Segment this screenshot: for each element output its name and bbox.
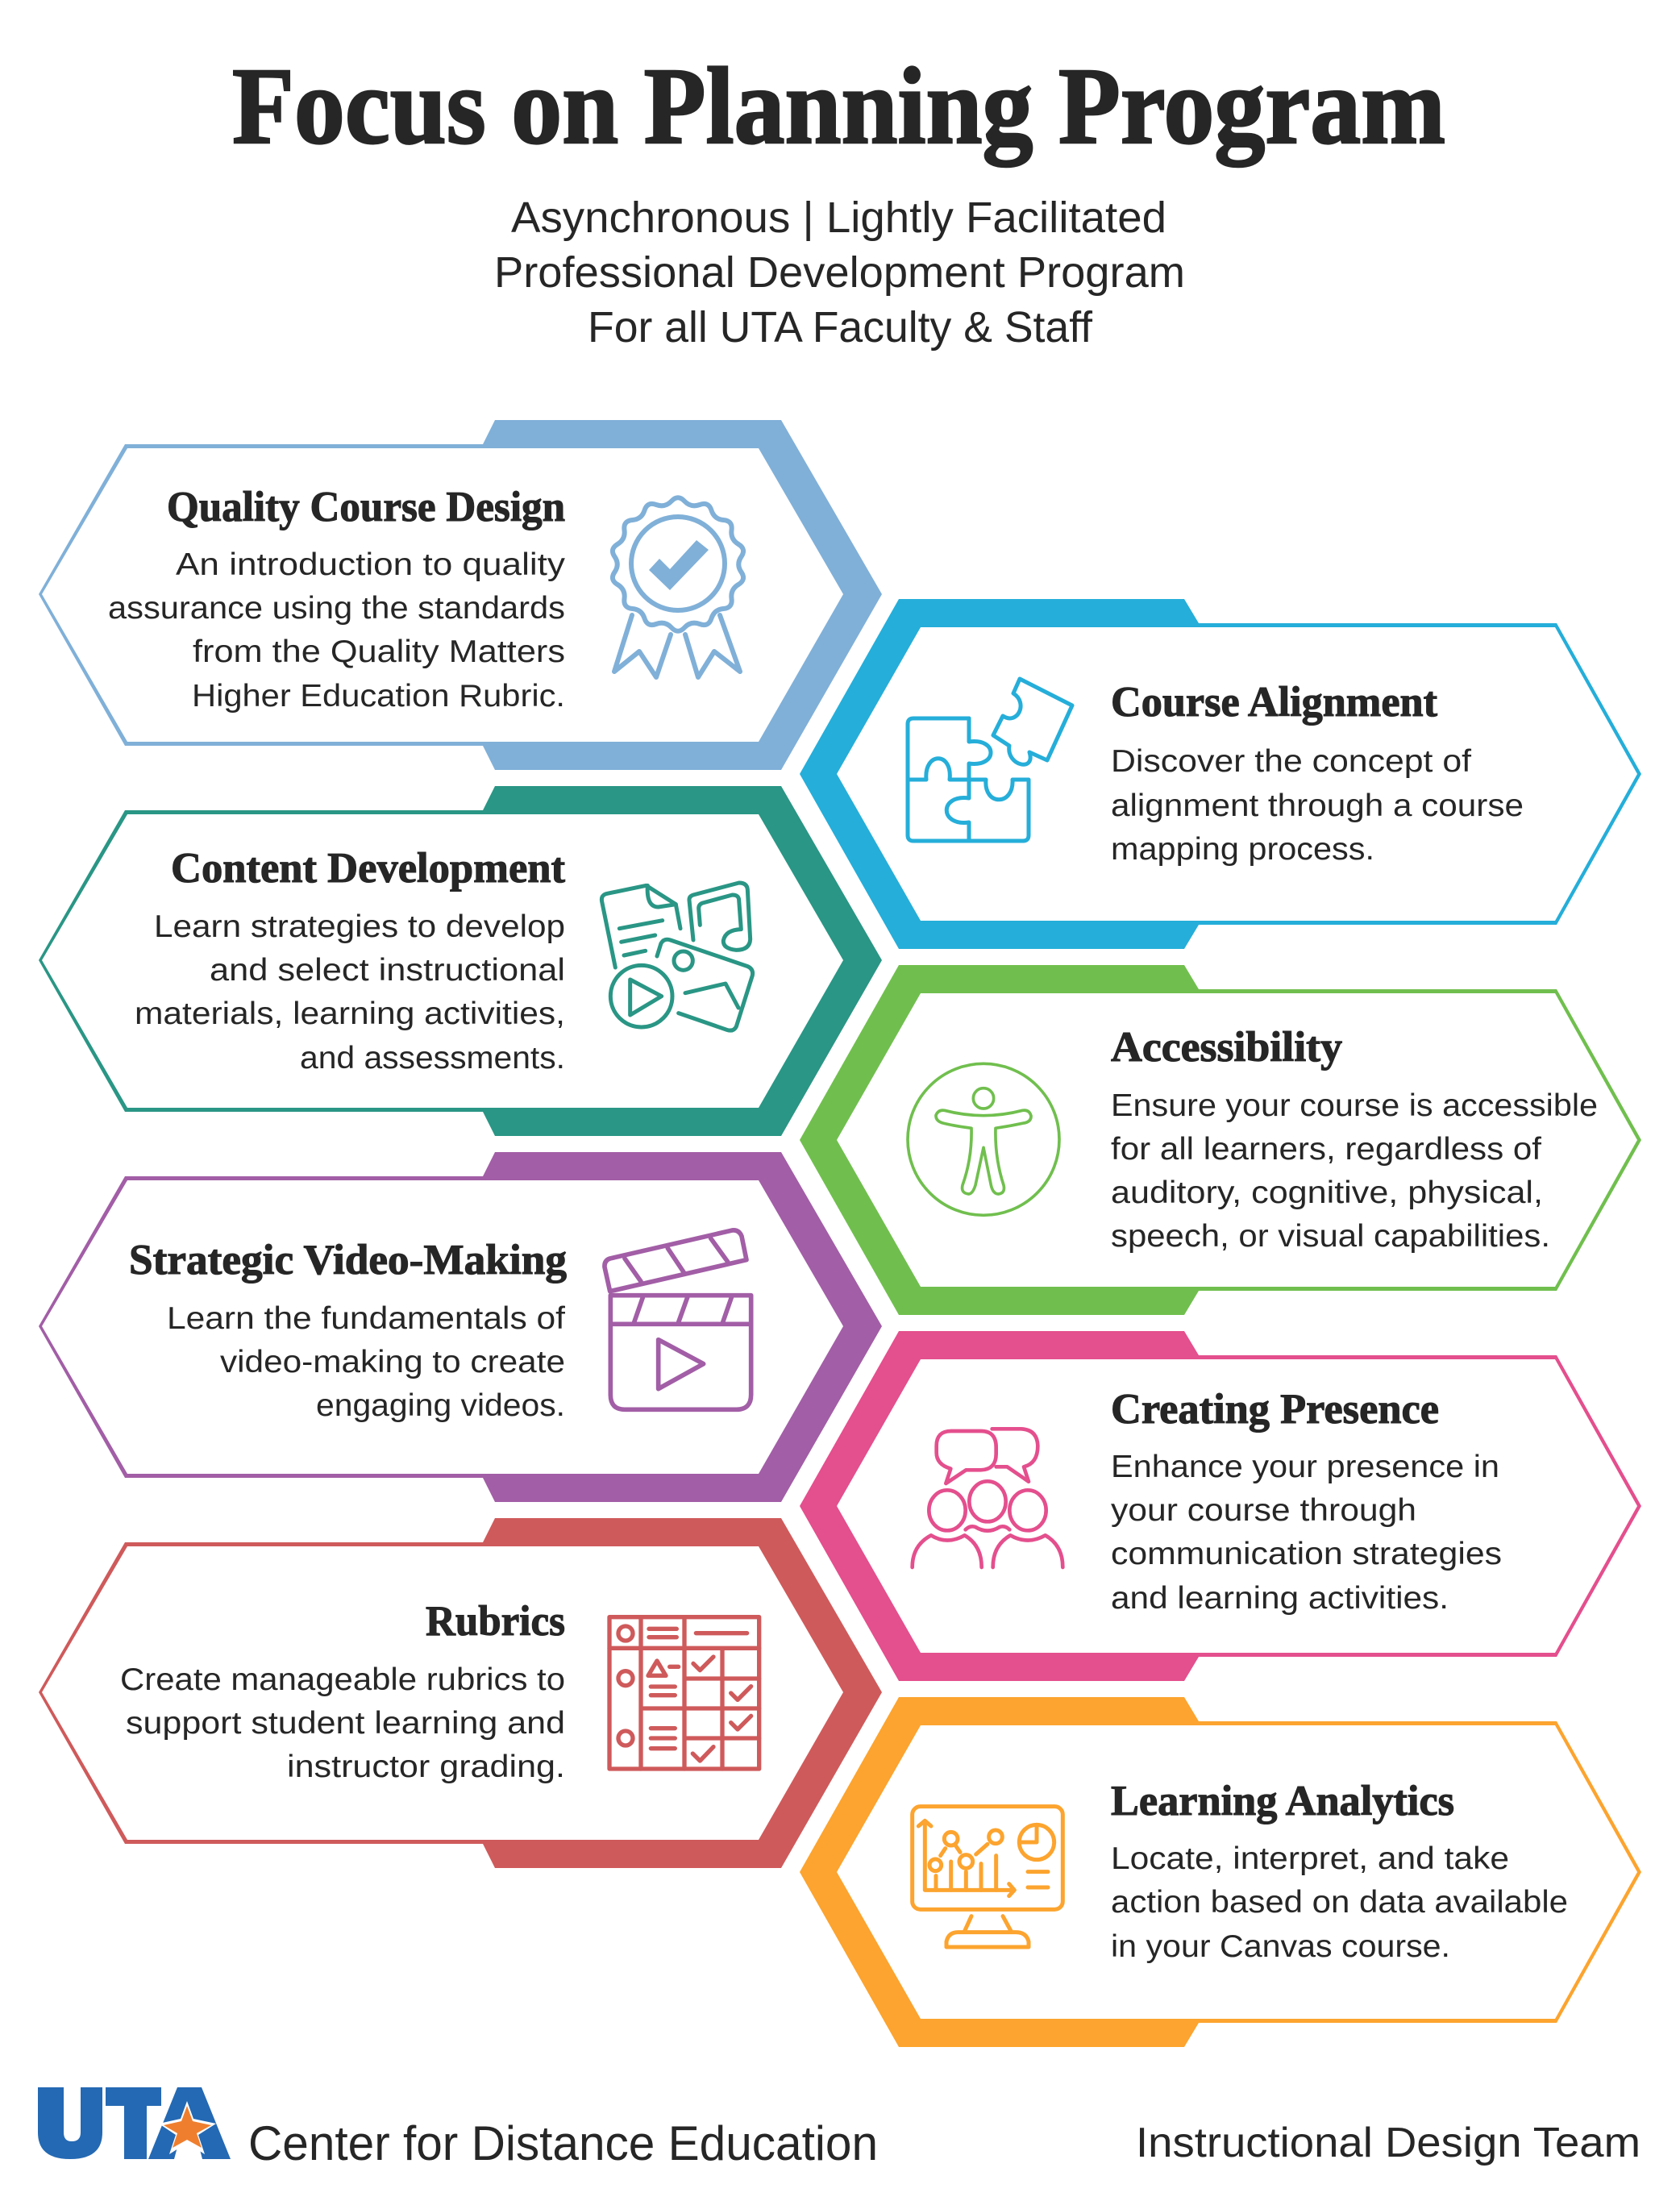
panel: Quality Course Design bbox=[39, 420, 882, 770]
panel: Creating Presence: your course through bbox=[1111, 1493, 1416, 1528]
panel: Quality Course Design: An introduction to quality bbox=[176, 547, 566, 582]
panel: Rubrics: Rubrics bbox=[426, 1598, 565, 1645]
panel: Content Development: Learn strategies to develop bbox=[154, 909, 565, 944]
panel: Rubrics: Create manageable rubrics to bbox=[120, 1662, 565, 1697]
panel: Strategic Video-Making bbox=[39, 1152, 882, 1502]
panel: Quality Course Design: Higher Education Rubric. bbox=[192, 679, 565, 714]
subtitle bbox=[494, 193, 1185, 352]
panel: Course Alignment: alignment through a course bbox=[1111, 788, 1524, 823]
panel: Course Alignment: Discover the concept of bbox=[1111, 744, 1471, 779]
panel: Rubrics: instructor grading. bbox=[287, 1750, 565, 1784]
footer: Center for Distance Education: Center for Distance Education bbox=[248, 2116, 878, 2170]
panel: Quality Course Design: from the Quality Matters bbox=[193, 635, 565, 669]
panel: Creating Presence: Enhance your presence in bbox=[1111, 1450, 1499, 1484]
icon: analytics monitor bbox=[913, 1807, 1062, 1947]
panel: Learning Analytics: Locate, interpret, and take bbox=[1111, 1841, 1509, 1876]
icon: people talking bbox=[913, 1429, 1062, 1567]
panel: Rubrics bbox=[39, 1518, 882, 1868]
panel: Content Development: and assessments. bbox=[300, 1041, 565, 1076]
panel: Strategic Video-Making: engaging videos. bbox=[316, 1388, 565, 1423]
title: Focus on Planning Program bbox=[232, 46, 1445, 167]
icon: rubric grid bbox=[609, 1617, 759, 1769]
panel: Accessibility bbox=[800, 965, 1641, 1315]
icon: award rosette bbox=[613, 497, 743, 677]
subtitle: Professional Development Program bbox=[494, 248, 1185, 297]
panel: Content Development: and select instructional bbox=[210, 953, 565, 988]
panel: Learning Analytics: action based on data available bbox=[1111, 1885, 1568, 1920]
panel: Course Alignment: mapping process. bbox=[1111, 832, 1374, 867]
panel: Creating Presence bbox=[800, 1331, 1641, 1681]
panel: Accessibility: for all learners, regardless of bbox=[1111, 1132, 1541, 1167]
panel: Strategic Video-Making: Strategic Video-Making bbox=[129, 1237, 567, 1284]
panel: Creating Presence: and learning activities. bbox=[1111, 1581, 1449, 1616]
panel: Creating Presence: Creating Presence bbox=[1111, 1386, 1439, 1433]
panel: Accessibility: auditory, cognitive, physical, bbox=[1111, 1175, 1543, 1210]
panel: Strategic Video-Making: Learn the fundamentals of bbox=[167, 1301, 565, 1336]
panel: Accessibility: Accessibility bbox=[1111, 1024, 1342, 1071]
panel: Accessibility: Ensure your course is accessible bbox=[1111, 1088, 1598, 1123]
icon: accessibility figure bbox=[908, 1063, 1059, 1215]
panel: Content Development: Content Development bbox=[171, 845, 565, 892]
panel: Learning Analytics: in your Canvas course. bbox=[1111, 1929, 1450, 1964]
panel: Strategic Video-Making: video-making to create bbox=[220, 1345, 565, 1379]
panel: Course Alignment bbox=[800, 599, 1641, 949]
footer: Instructional Design Team: Instructional Design Team bbox=[1136, 2120, 1640, 2166]
panel: Accessibility: speech, or visual capabilities. bbox=[1111, 1219, 1550, 1254]
logo: UTA bbox=[38, 2087, 231, 2159]
panel: Content Development bbox=[39, 786, 882, 1136]
panel: Content Development: materials, learning activities, bbox=[135, 996, 565, 1031]
subtitle: Asynchronous | Lightly Facilitated bbox=[511, 193, 1166, 242]
icon: clapperboard bbox=[605, 1230, 751, 1409]
panel: Learning Analytics bbox=[800, 1697, 1641, 2047]
panel: Quality Course Design: Quality Course Design bbox=[167, 484, 565, 530]
panel: Course Alignment: Course Alignment bbox=[1111, 679, 1437, 726]
icon: puzzle pieces bbox=[908, 679, 1072, 841]
icon: media files bbox=[601, 883, 753, 1030]
subtitle: For all UTA Faculty & Staff bbox=[588, 303, 1093, 352]
panel: Quality Course Design: assurance using the standards bbox=[108, 591, 565, 626]
panel: Learning Analytics: Learning Analytics bbox=[1111, 1778, 1454, 1824]
panel: Rubrics: support student learning and bbox=[126, 1706, 565, 1741]
panel: Creating Presence: communication strategies bbox=[1111, 1537, 1502, 1571]
